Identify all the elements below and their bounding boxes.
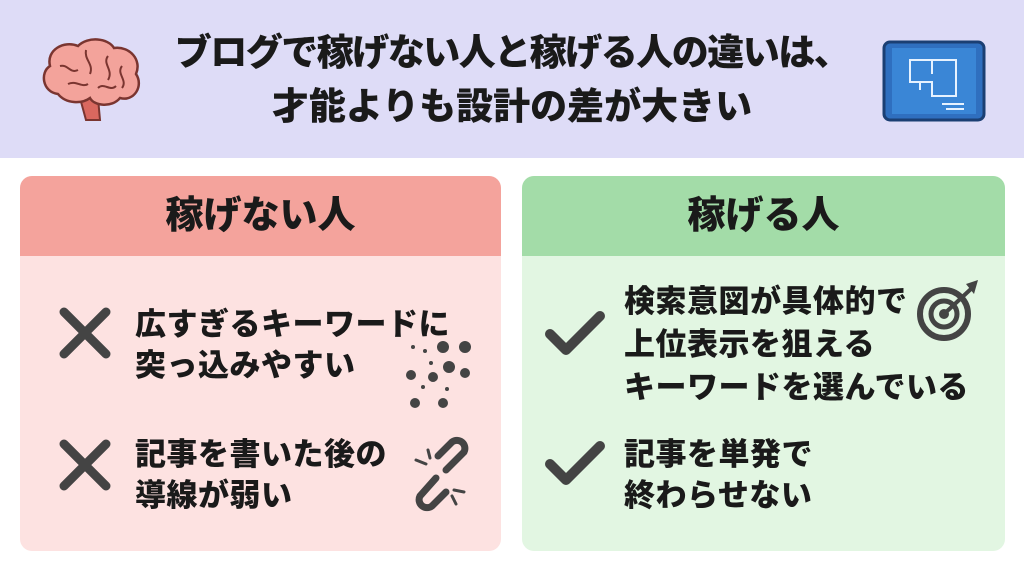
header band (0, 0, 1024, 158)
panel: cannot earn (20, 176, 501, 551)
text: item 2 (135, 437, 387, 513)
title (175, 32, 849, 127)
icon: cross 1 (60, 308, 110, 358)
panel: can earn (522, 176, 1005, 551)
text: item 2: 終わらせない (624, 478, 812, 513)
icon: scattered dots (406, 341, 471, 408)
icon: check 1 (545, 311, 605, 355)
text: item 2 (624, 437, 813, 513)
text: item 1: キーワードを選んでいる (624, 370, 969, 405)
text: item 1: 広すぎるキーワードに (135, 307, 450, 342)
text: item 2: 導線が弱い (135, 478, 292, 513)
text: item 1 (624, 284, 969, 405)
text: item 1: 突っ込みやすい (135, 348, 356, 383)
title: ブログで稼げない人と稼げる人の違いは、 (175, 32, 849, 73)
icon: cross 2 (60, 440, 110, 490)
text: item 2: 記事を書いた後の (135, 437, 387, 472)
text: item 1: 検索意図が具体的で (624, 284, 908, 319)
icon: broken chain (414, 436, 468, 512)
icon: brain (42, 38, 140, 121)
text: item 1 (135, 307, 450, 383)
title: 才能よりも設計の差が大きい (272, 86, 752, 127)
text: item 1: 上位表示を狙える (624, 327, 875, 362)
panel heading: 稼げる人 (687, 195, 840, 237)
icon: target (917, 280, 978, 341)
panel heading (522, 176, 1005, 256)
icon: check 2 (545, 441, 605, 485)
text: item 2: 記事を単発で (624, 437, 813, 472)
icon: blueprint (882, 40, 986, 122)
panel heading: 稼げない人 (165, 195, 356, 237)
panel heading (20, 176, 501, 256)
